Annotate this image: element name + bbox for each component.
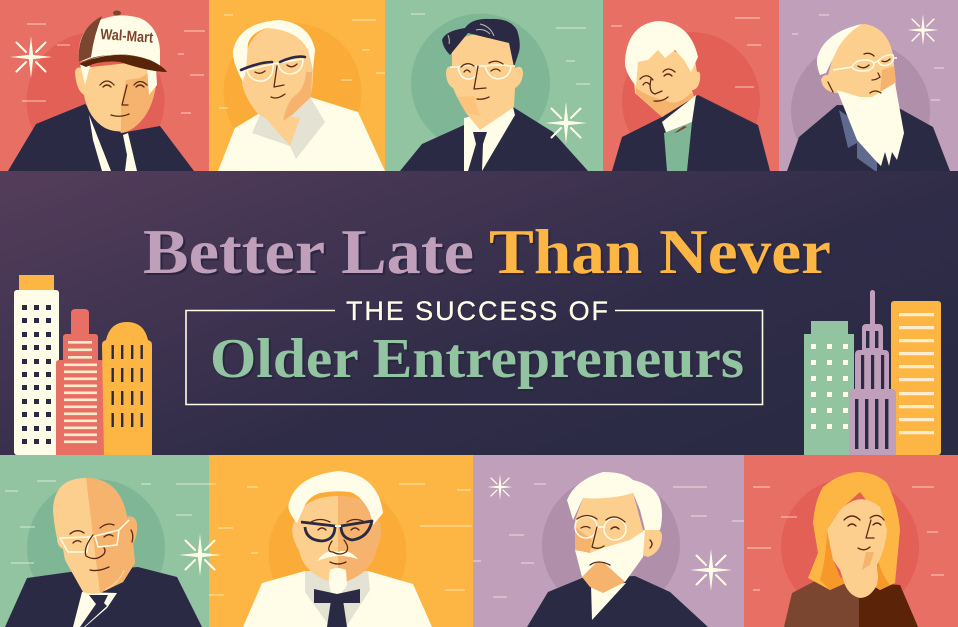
panel: bald portrait with glasses (0, 455, 216, 627)
panel: Bernie Marcus portrait (209, 0, 391, 172)
subtitle: The Success Of: THE SUCCESS OF (346, 296, 608, 326)
title: Older Entrepreneurs: Older Entrepreneurs (210, 328, 744, 390)
frame around subtitle (186, 310, 762, 404)
panel: Colonel Sanders portrait (209, 455, 473, 627)
panel: bearded elder portrait (779, 0, 958, 180)
panel: title banner (0, 171, 958, 455)
panel: Charles Flint portrait (603, 0, 779, 172)
title: Better Late Than Never: Than Never (489, 217, 831, 287)
icon: left city buildings (14, 275, 152, 455)
title: Better Late Than Never: Better Late (143, 217, 474, 287)
panel: Sam Walton portrait: Wal-Mart (100, 26, 154, 47)
panel: Sam Walton portrait (0, 0, 209, 172)
title: Better Late Than Never (143, 217, 831, 287)
panel: Ray Kroc portrait (385, 0, 603, 172)
icon: right city buildings (804, 290, 941, 455)
panel: blonde woman portrait (744, 455, 958, 627)
panel: bearded portrait with round glasses (473, 455, 744, 627)
icon: sparkle on panel border (179, 534, 221, 576)
